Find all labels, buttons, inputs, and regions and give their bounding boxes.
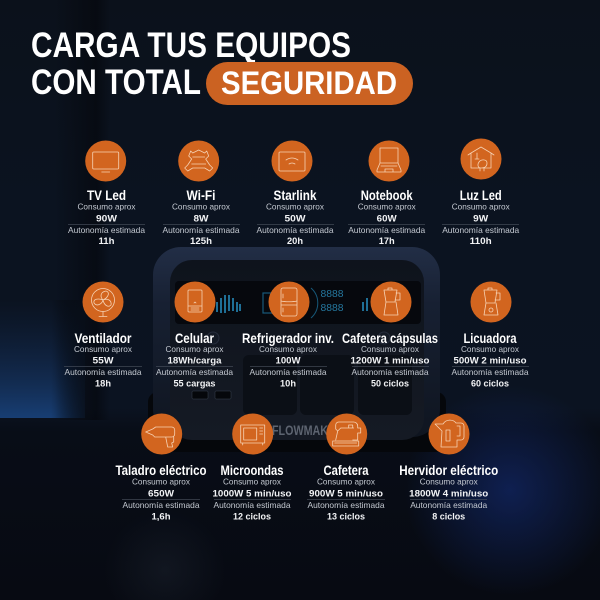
item: Wi-Fi: 8W [194,214,209,224]
icon: drill [141,414,182,454]
item: Starlink [256,140,334,247]
item: Celular: Consumo aprox [166,344,224,354]
item: Hervidor eléctrico: 8 ciclos [432,512,465,522]
item: Ventilador [64,282,142,390]
item: Taladro eléctrico: 1,6h [152,512,171,522]
item: Licuadora: Consumo aprox [461,344,520,354]
item: Ventilador: 18h [95,378,111,390]
item: Wi-Fi: Autonomía estimada [162,225,240,235]
title highlight pill: SEGURIDAD [221,65,397,101]
item: Starlink: 20h [287,236,303,247]
item: Hervidor eléctrico: Hervidor eléctrico [399,463,498,478]
item: Luz Led: 9W [473,214,488,224]
item: Notebook: 60W [377,214,397,224]
item: Notebook: 17h [379,236,395,247]
item: Microondas: Autonomía estimada [214,500,291,510]
item: Celular [156,282,233,390]
icon: phone with battery [174,282,216,322]
item: Cafetera: Cafetera [324,463,369,478]
icon: TV [85,140,126,182]
item: Licuadora: 60 ciclos [471,378,509,390]
item: TV Led [68,140,145,247]
item: TV Led: Consumo aprox [78,202,136,212]
item: Luz Led [442,138,519,247]
item: Celular: Autonomía estimada [156,367,233,377]
item: Notebook: Consumo aprox [358,202,416,212]
item: Cafetera cápsulas: Consumo aprox [361,344,420,354]
icon: satellite dish [272,140,312,182]
item: Notebook: Autonomía estimada [348,225,425,235]
item: Wi-Fi: Wi-Fi [186,188,216,203]
item: Refrigerador inv.: Autonomía estimada [250,367,327,377]
item: Celular: Celular [175,331,215,346]
item: Licuadora [452,282,529,390]
item: Wi-Fi: 125h [190,236,212,247]
item: Taladro eléctrico: Consumo aprox [132,477,191,487]
item: Luz Led: Autonomía estimada [442,225,519,235]
item: Ventilador: Ventilador [74,331,132,346]
item: Taladro eléctrico: 650W [148,488,174,500]
item: Wi-Fi [162,140,240,247]
item: Taladro eléctrico: Autonomía estimada [122,500,200,510]
item: Cafetera: 13 ciclos [327,512,365,522]
item: Licuadora: 500W 2 min/uso [454,356,527,366]
item: Cafetera cápsulas: 1200W 1 min/uso [350,356,430,366]
portable power station: 8888 [320,302,344,314]
item: Notebook: Notebook [361,188,413,203]
icon: router [178,140,219,182]
icon: kettle [428,414,470,454]
item: Microondas [212,414,292,522]
item: Cafetera cápsulas: 50 ciclos [371,378,409,390]
item: Starlink: Consumo aprox [266,202,325,212]
item: Starlink: 50W [284,214,306,224]
icon: blender [470,282,512,322]
item: Taladro eléctrico: Taladro eléctrico [116,463,206,478]
item: Cafetera: Consumo aprox [317,477,376,487]
icon: fan [82,282,124,322]
item: Cafetera: 900W 5 min/uso [309,488,383,500]
item: Refrigerador inv.: Refrigerador inv. [242,331,334,346]
item: Celular: 18Wh/carga [168,356,222,366]
item: Microondas: Consumo aprox [223,477,282,487]
item: Microondas: Microondas [220,463,284,478]
item: Notebook [348,140,425,247]
icon: capsule machine jug [370,282,412,322]
portable power station [148,247,446,452]
item: Cafetera: Autonomía estimada [308,500,385,510]
portable power station: 8888 [320,288,344,300]
item: Ventilador: Consumo aprox [74,344,133,354]
item: Licuadora: Licuadora [464,331,517,346]
item: Refrigerador inv.: 10h [280,378,296,390]
item: TV Led: TV Led [87,188,126,203]
title: CON TOTAL [31,63,201,102]
item: Luz Led: 110h [470,236,492,247]
portable power station: FLOWMAK [272,423,328,438]
icon: laptop [368,140,410,182]
item: Taladro eléctrico [116,414,206,522]
item: Celular: 55 cargas [174,378,216,390]
item: Starlink: Starlink [274,188,317,203]
item: TV Led: Autonomía estimada [68,225,145,235]
item: TV Led: 90W [96,214,117,224]
item: Licuadora: Autonomía estimada [452,367,529,377]
item: Hervidor eléctrico [399,414,498,522]
item: Cafetera cápsulas: Cafetera cápsulas [342,331,438,346]
icon: microwave [232,414,273,454]
icon: house with lamp [460,138,502,180]
item: Hervidor eléctrico: Consumo aprox [420,477,478,487]
item: Refrigerador inv.: Consumo aprox [259,344,318,354]
item: Cafetera [307,414,385,522]
icon: fridge [268,282,310,322]
item: Hervidor eléctrico: 1800W 4 min/uso [409,488,488,500]
item: Cafetera cápsulas: Autonomía estimada [352,367,429,377]
item: Microondas: 12 ciclos [233,512,271,522]
item: Ventilador: Autonomía estimada [64,367,142,377]
item: Wi-Fi: Consumo aprox [172,202,231,212]
item: Luz Led: Consumo aprox [452,202,510,212]
item: Ventilador: 55W [92,356,114,366]
item: Starlink: Autonomía estimada [256,225,334,235]
item: TV Led: 11h [98,236,115,247]
title: CARGA TUS EQUIPOS [31,26,351,65]
item: Refrigerador inv.: 100W [276,356,301,366]
item: Hervidor eléctrico: Autonomía estimada [410,500,487,510]
title [31,26,413,105]
icon: coffee machine [326,414,367,454]
item: Luz Led: Luz Led [460,188,502,203]
item: Microondas: 1000W 5 min/uso [212,488,292,500]
item: Refrigerador inv. [242,282,334,390]
item: Cafetera cápsulas [342,282,438,390]
